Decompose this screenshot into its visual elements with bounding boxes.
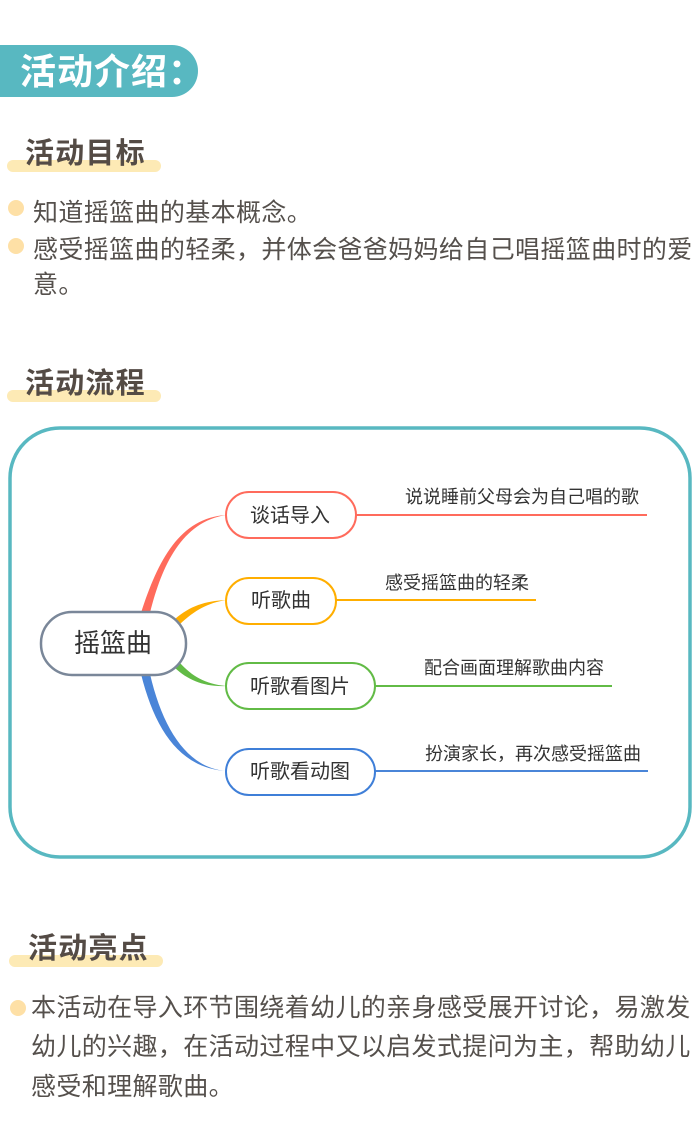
bullet list: goals [8, 199, 693, 299]
branch: yellow: 听歌曲 [251, 589, 311, 612]
branch: yellow: 感受摇篮曲的轻柔 [385, 573, 529, 593]
branch: red: 说说睡前父母会为自己唱的歌 [405, 487, 639, 507]
branch: red [141, 487, 647, 613]
text block: highlights: 幼儿的兴趣，在活动过程中又以启发式提问为主，帮助幼儿 [31, 1033, 691, 1061]
branch: green: 配合画面理解歌曲内容 [424, 658, 604, 678]
text block: highlights: 本活动在导入环节围绕着幼儿的亲身感受展开讨论，易激发 [31, 994, 691, 1022]
panel: mind map [8, 426, 692, 859]
branch: blue [141, 674, 648, 795]
heading: 活动亮点: 活动亮点 [28, 933, 149, 965]
branch: blue: 扮演家长，再次感受摇篮曲 [425, 744, 641, 764]
bullet list: goals: 意。 [33, 271, 84, 299]
central node [41, 612, 186, 675]
heading: 活动目标: 活动目标 [25, 138, 146, 170]
bullet list: goals: 感受摇篮曲的轻柔，并体会爸爸妈妈给自己唱摇篮曲时的爱 [33, 236, 693, 264]
title badge [0, 45, 198, 97]
text block: highlights: 感受和理解歌曲。 [31, 1073, 234, 1101]
branch: red: 谈话导入 [250, 504, 330, 527]
branch: blue: 听歌看动图 [250, 760, 350, 783]
branch: green: 听歌看图片 [250, 675, 350, 698]
title badge: 活动介绍： [20, 51, 205, 92]
heading: 活动流程: 活动流程 [25, 368, 146, 400]
text block: highlights [10, 994, 691, 1101]
bullet list: goals: 知道摇篮曲的基本概念。 [33, 199, 312, 227]
branch: yellow [175, 573, 536, 624]
central node: 摇篮曲 [74, 628, 152, 658]
branch: green [175, 658, 612, 709]
